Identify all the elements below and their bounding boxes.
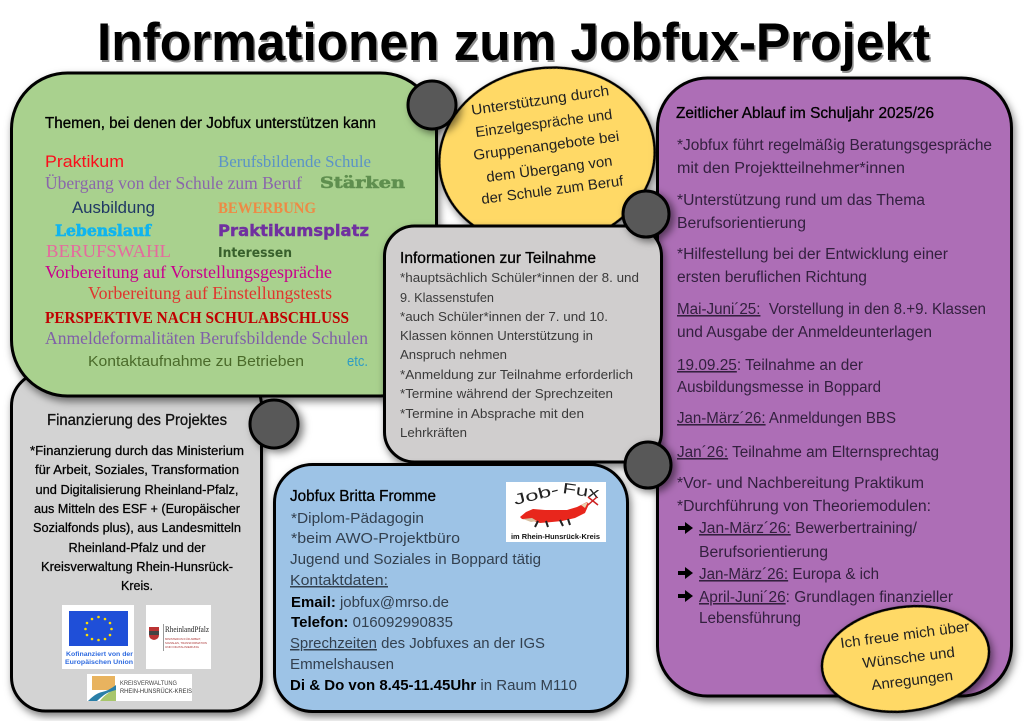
callout: Unterstützung: Unterstützung durch bbox=[470, 83, 610, 119]
logo: Kreisverwaltung bbox=[87, 674, 193, 701]
heading: Jobfux Britta Fromme: Jobfux Britta Fromme bbox=[290, 488, 436, 505]
heading: Zeitlicher Ablauf: Zeitlicher Ablauf im Schuljahr 2025/26 bbox=[676, 105, 934, 122]
panel: Zeitlicher Ablauf bbox=[658, 78, 1012, 696]
logo: Rheinland-Pfalz: SOZIALES, TRANSFORMATION bbox=[165, 641, 207, 645]
connector circle: right upper bbox=[623, 191, 669, 237]
word cloud: Themen: Übergang von der Schule zum Beruf bbox=[45, 173, 302, 193]
arrow bbox=[678, 522, 693, 534]
text block: Ablauf: ersten beruflichen Richtung bbox=[677, 269, 867, 286]
heading: Themen: Themen, bei denen der Jobfux unterstützen kann bbox=[45, 115, 376, 132]
text block: Finanzierung bbox=[30, 444, 244, 593]
text block: Ablauf: *Durchführung von Theoriemodulen: bbox=[677, 498, 931, 515]
panel: Kontakt bbox=[274, 464, 628, 712]
text block: Ablauf: April-Juni´26: Grundlagen finanzieller bbox=[699, 589, 953, 606]
text block: Finanzierung: Kreisverwaltung Rhein-Hunsrück- bbox=[41, 560, 233, 574]
arrow bbox=[678, 590, 693, 602]
arrow bbox=[678, 567, 693, 579]
word cloud: Themen bbox=[45, 152, 405, 370]
word cloud: Themen: Interessen bbox=[218, 245, 292, 261]
text block: Teilnahme bbox=[400, 270, 639, 440]
word cloud: Themen: Vorbereitung auf Einstellungstests bbox=[88, 283, 332, 303]
callout: Unterstützung: dem Übergang von bbox=[485, 152, 613, 186]
connector circle: top bbox=[408, 81, 456, 129]
text block: Teilnahme: Lehrkräften bbox=[400, 425, 467, 440]
text block: Kontakt: Telefon: 016092990835 bbox=[291, 614, 453, 631]
text block: Kontakt: Kontaktdaten: bbox=[290, 572, 388, 589]
panel: Teilnahme bbox=[384, 226, 662, 462]
panel: Themen bbox=[12, 73, 436, 396]
logo: EU bbox=[62, 605, 134, 669]
word cloud: Themen: Vorbereitung auf Vorstellungsgespräche bbox=[45, 262, 332, 282]
word cloud: Themen: Anmeldeformalitäten Berufsbildende Schulen bbox=[45, 328, 368, 348]
text block: Ablauf: *Unterstützung rund um das Thema bbox=[677, 192, 925, 209]
text block: Ablauf: *Jobfux führt regelmäßig Beratungsgespräche bbox=[677, 137, 992, 154]
callout: Unterstützung: der Schule zum Beruf bbox=[480, 173, 625, 208]
logo: Kreisverwaltung: KREISVERWALTUNG bbox=[120, 680, 177, 687]
text block: Finanzierung: für Arbeit, Soziales, Transformation bbox=[35, 463, 239, 477]
connector circle: right lower bbox=[625, 442, 671, 488]
text block: Finanzierung: *Finanzierung durch das Ministerium bbox=[30, 444, 244, 458]
text block: Ablauf: Jan-März´26: Bewerbertraining/ bbox=[699, 520, 918, 537]
text block: Ablauf: Jan´26: Teilnahme am Elternsprechtag bbox=[677, 444, 939, 461]
connector circle: left bbox=[250, 400, 298, 448]
text block: Kontakt: Emmelshausen bbox=[290, 656, 394, 673]
callout: Unterstützung bbox=[428, 54, 666, 260]
word cloud: Themen: Lebenslauf bbox=[55, 221, 152, 240]
text block: Kontakt bbox=[290, 510, 577, 694]
text block: Teilnahme: Klassen können Unterstützung in bbox=[400, 328, 593, 343]
logo: Rheinland-Pfalz: MINISTERIUM FÜR ARBEIT, bbox=[165, 637, 201, 641]
text block: Ablauf bbox=[677, 137, 992, 627]
text block: Ablauf: Mai-Juni´25: Vorstellung in den 8.+9. Klassen bbox=[677, 301, 986, 318]
text block: Teilnahme: *hauptsächlich Schüler*innen der 8. und bbox=[400, 270, 639, 285]
word cloud: Themen: PERSPEKTIVE NACH SCHULABSCHLUSS bbox=[45, 308, 349, 327]
text block: Teilnahme: Anspruch nehmen bbox=[400, 347, 507, 362]
title: Informationen zum Jobfux-Projekt bbox=[98, 15, 932, 74]
callout: Wünsche: Wünsche und bbox=[862, 645, 956, 672]
title: Informationen zum Jobfux-Projekt bbox=[97, 13, 930, 72]
heading: Teilnahme: Informationen zur Teilnahme bbox=[400, 250, 596, 267]
word cloud: Themen: Berufsbildende Schule bbox=[218, 152, 371, 171]
word cloud: Themen: BEWERBUNG bbox=[218, 200, 317, 217]
callout: Wünsche bbox=[815, 596, 996, 721]
text block: Ablauf: mit den Projektteilnehmer*innen bbox=[677, 160, 905, 177]
text block: Ablauf: und Ausgabe der Anmeldeunterlagen bbox=[677, 324, 932, 341]
logo: EU: Europäischen Union bbox=[65, 660, 133, 666]
text block: Teilnahme: *Anmeldung zur Teilnahme erforderlich bbox=[400, 367, 633, 382]
logo: Rheinland-Pfalz: UND DIGITALISIERUNG bbox=[165, 645, 200, 649]
text block: Kontakt: Email: jobfux@mrso.de bbox=[291, 594, 449, 611]
text block: Kontakt: Di & Do von 8.45-11.45Uhr in Raum M110 bbox=[290, 677, 577, 694]
word cloud: Themen: BERUFSWAHL bbox=[46, 241, 171, 261]
heading: Finanzierung des Projektes: Finanzierung des Projektes bbox=[47, 412, 227, 429]
text block: Finanzierung: Sozialfonds plus), aus Landesmitteln bbox=[33, 521, 241, 535]
logo: Job-Fux bbox=[506, 480, 606, 542]
text block: Kontakt: Sprechzeiten des Jobfuxes an der IGS bbox=[290, 635, 545, 652]
text block: Teilnahme: 9. Klassenstufen bbox=[400, 290, 494, 305]
text block: Ablauf: Berufsorientierung bbox=[677, 215, 806, 232]
word cloud: Themen: etc. bbox=[347, 353, 368, 370]
logo: Job-Fux: Job- bbox=[512, 481, 561, 509]
word cloud: Themen: Kontaktaufnahme zu Betrieben bbox=[88, 353, 304, 370]
text block: Ablauf: Lebensführung bbox=[699, 610, 801, 627]
word cloud: Themen: Ausbildung bbox=[72, 199, 155, 217]
logo: Rheinland-Pfalz bbox=[146, 605, 211, 669]
text block: Kontakt: *Diplom-Pädagogin bbox=[291, 510, 424, 527]
text block: Ablauf: *Vor- und Nachbereitung Praktikum bbox=[677, 475, 924, 492]
text block: Kontakt: *beim AWO-Projektbüro bbox=[291, 530, 460, 547]
word cloud: Themen: Praktikum bbox=[45, 152, 124, 171]
callout: Unterstützung: Einzelgespräche und bbox=[474, 107, 613, 141]
callout: Unterstützung: Gruppenangebote bei bbox=[472, 129, 620, 164]
text block: Ablauf: Berufsorientierung bbox=[699, 544, 828, 561]
logo: Rheinland-Pfalz: RheinlandPfalz bbox=[165, 625, 209, 634]
logo: Job-Fux: im Rhein-Hunsrück-Kreis bbox=[511, 532, 600, 541]
callout: Wünsche: Ich freue mich über bbox=[839, 619, 971, 652]
text block: Finanzierung: Rheinland-Pfalz und der bbox=[68, 541, 206, 555]
logo: EU: Kofinanziert von der bbox=[66, 652, 134, 658]
panel: Finanzierung bbox=[12, 372, 262, 711]
text block: Ablauf: Ausbildungsmesse in Boppard bbox=[677, 379, 881, 396]
text block: Ablauf: 19.09.25: Teilnahme an der bbox=[677, 357, 863, 374]
text block: Teilnahme: *Termine in Absprache mit den bbox=[400, 406, 584, 421]
text block: Ablauf: Jan-März´26: Anmeldungen BBS bbox=[677, 410, 896, 427]
text block: Teilnahme: *auch Schüler*innen der 7. und 10. bbox=[400, 309, 608, 324]
logo: Job-Fux: Fux bbox=[561, 480, 601, 502]
text block: Ablauf: Jan-März´26: Europa & ich bbox=[699, 566, 879, 583]
text block: Finanzierung: Kreis. bbox=[121, 579, 153, 593]
text block: Finanzierung: aus Mitteln des ESF + (Europäischer bbox=[34, 502, 240, 516]
word cloud: Themen: Praktikumsplatz bbox=[218, 221, 369, 240]
text block: Finanzierung: und Digitalisierung Rheinland-Pfalz, bbox=[36, 483, 238, 497]
text block: Kontakt: Jugend und Soziales in Boppard tätig bbox=[290, 551, 541, 568]
logo: Kreisverwaltung: RHEIN-HUNSRÜCK-KREIS bbox=[120, 687, 193, 695]
text block: Teilnahme: *Termine während der Sprechzeiten bbox=[400, 386, 613, 401]
word cloud: Themen: Stärken bbox=[320, 173, 405, 192]
callout: Wünsche: Anregungen bbox=[871, 668, 954, 694]
text block: Ablauf: *Hilfestellung bei der Entwicklung einer bbox=[677, 246, 948, 263]
